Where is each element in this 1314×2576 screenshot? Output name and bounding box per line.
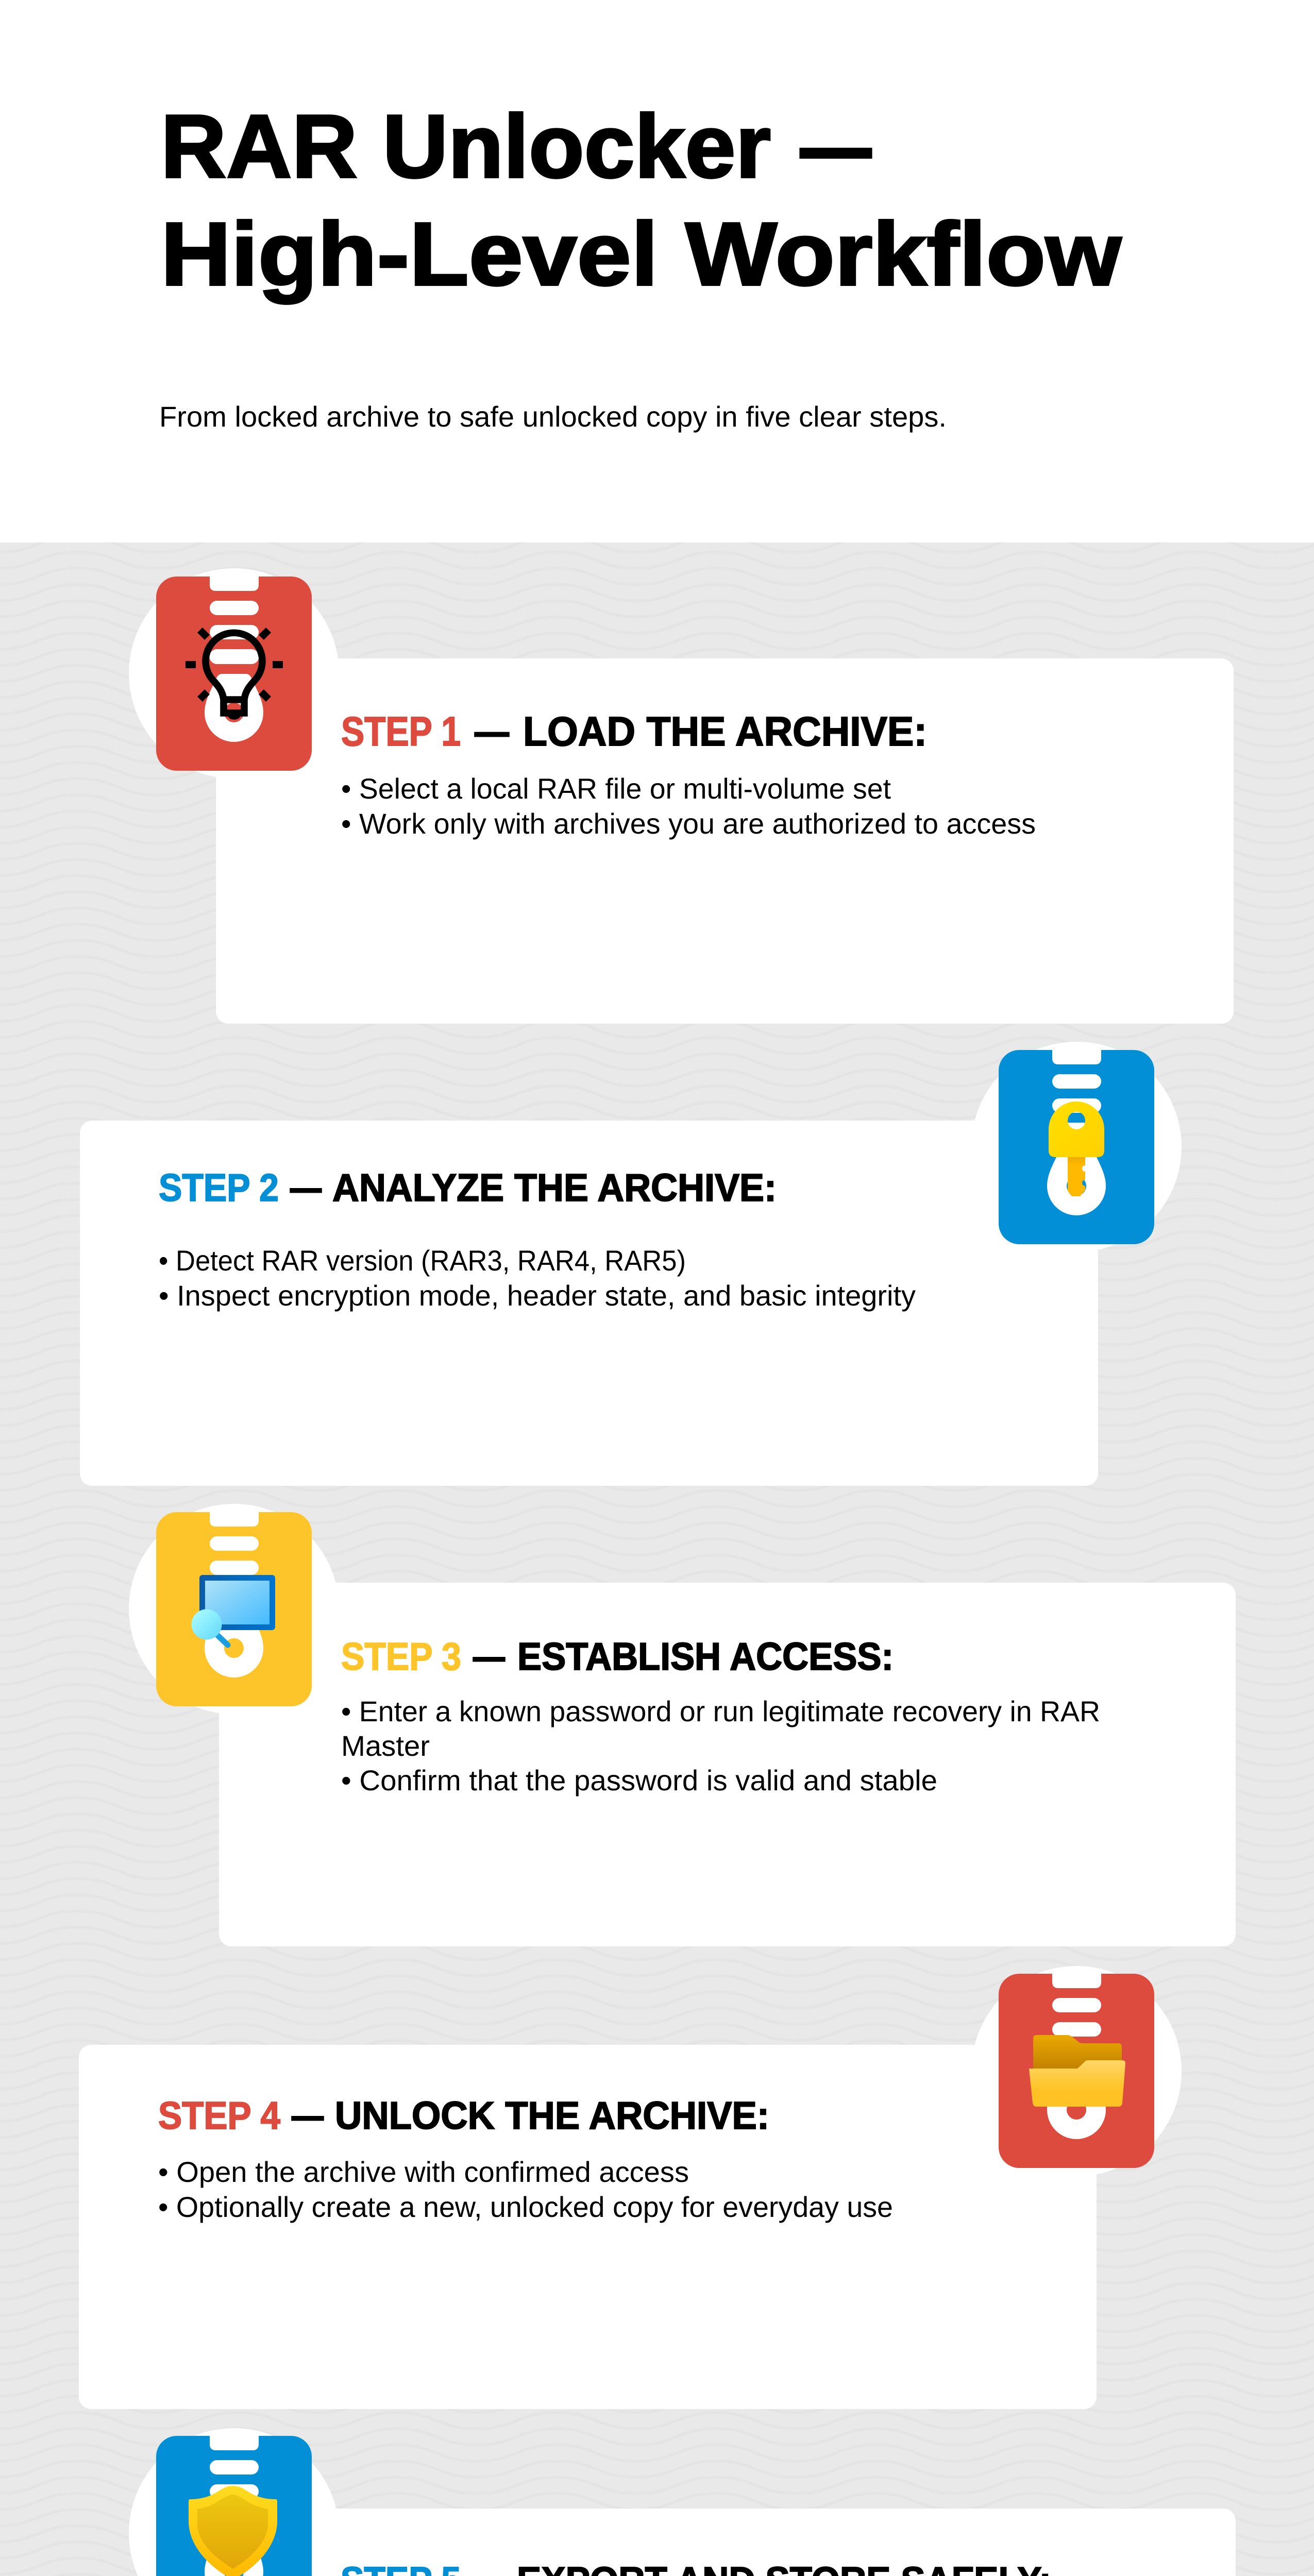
step 3 heading: — [473, 1635, 505, 1678]
step 3 zipper badge [156, 1512, 312, 1706]
step 3 heading: ESTABLISH ACCESS: [517, 1635, 894, 1678]
title: — [800, 96, 871, 196]
step 3 card [219, 1583, 1236, 1946]
step 1 bullets [341, 772, 1036, 840]
step 5 zipper badge [156, 2436, 312, 2576]
step 2 bullets: • Inspect encryption mode, header state, and basic integrity [159, 1279, 916, 1312]
step 1 zipper badge [156, 577, 312, 771]
step 4 badge backdrop circle [971, 1966, 1182, 2176]
panel: step 5 [129, 2428, 1236, 2576]
step 2 zipper badge [999, 1050, 1154, 1244]
step 4 card [79, 2045, 1097, 2409]
panel: step 4 [79, 1966, 1182, 2409]
step 1 heading: STEP 1 [341, 708, 461, 754]
step 1 bullets: • Select a local RAR file or multi-volume set [341, 772, 891, 805]
step 3 heading: STEP 3 [341, 1635, 461, 1678]
step 5 badge backdrop circle [129, 2428, 339, 2576]
step 1 badge backdrop circle [129, 568, 339, 778]
title: RAR Unlocker [161, 96, 771, 196]
step 5 card [219, 2509, 1236, 2576]
panel: step 2 [80, 1042, 1182, 1486]
step 3 bullets: • Confirm that the password is valid and stable [341, 1764, 937, 1797]
step 1 heading: LOAD THE ARCHIVE: [523, 708, 927, 754]
step 4 bullets: • Open the archive with confirmed access [158, 2156, 689, 2188]
step 2 heading: ANALYZE THE ARCHIVE: [332, 1166, 777, 1209]
step 2 heading [159, 1166, 777, 1209]
step 4 bullets: • Optionally create a new, unlocked copy for everyday use [158, 2191, 893, 2223]
title: High-Level Workflow [161, 204, 1122, 304]
step 2 card [80, 1121, 1098, 1486]
step 3 badge backdrop circle [129, 1504, 339, 1714]
step 1 heading: — [475, 708, 509, 754]
icon: monitor with magnifier [192, 1575, 275, 1645]
step 4 heading: UNLOCK THE ARCHIVE: [335, 2094, 769, 2137]
step 3 bullets: Master [341, 1730, 430, 1762]
step 3 bullets [341, 1695, 1100, 1797]
step 1 bullets: • Work only with archives you are authorized to access [341, 807, 1036, 840]
panel: step 3 [129, 1504, 1236, 1946]
icon: open folder [1029, 2035, 1125, 2107]
subtitle: From locked archive to safe unlocked copy in five clear steps. [159, 400, 947, 433]
step 3 heading [341, 1635, 894, 1678]
step 4 heading [158, 2094, 769, 2137]
step 4 bullets [158, 2156, 893, 2223]
step 1 heading [341, 708, 927, 754]
step 1 card [216, 658, 1234, 1024]
step 2 heading: STEP 2 [159, 1166, 279, 1209]
step 3 bullets: • Enter a known password or run legitimate recovery in RAR [341, 1695, 1100, 1727]
step 4 heading: — [292, 2094, 324, 2137]
step 2 bullets: • Detect RAR version (RAR3, RAR4, RAR5) [159, 1244, 686, 1277]
step 4 heading: STEP 4 [158, 2094, 280, 2137]
step 2 heading: — [290, 1166, 322, 1209]
icon: key [1049, 1101, 1104, 1196]
panel: step 1 [129, 568, 1234, 1024]
icon: shield [189, 2486, 277, 2576]
step 4 zipper badge [999, 1974, 1154, 2168]
patterned wave background band [0, 543, 1314, 2576]
icon: light bulb [186, 628, 283, 720]
title [161, 96, 1122, 304]
step 2 bullets [159, 1244, 916, 1312]
step 2 badge backdrop circle [971, 1042, 1182, 1252]
